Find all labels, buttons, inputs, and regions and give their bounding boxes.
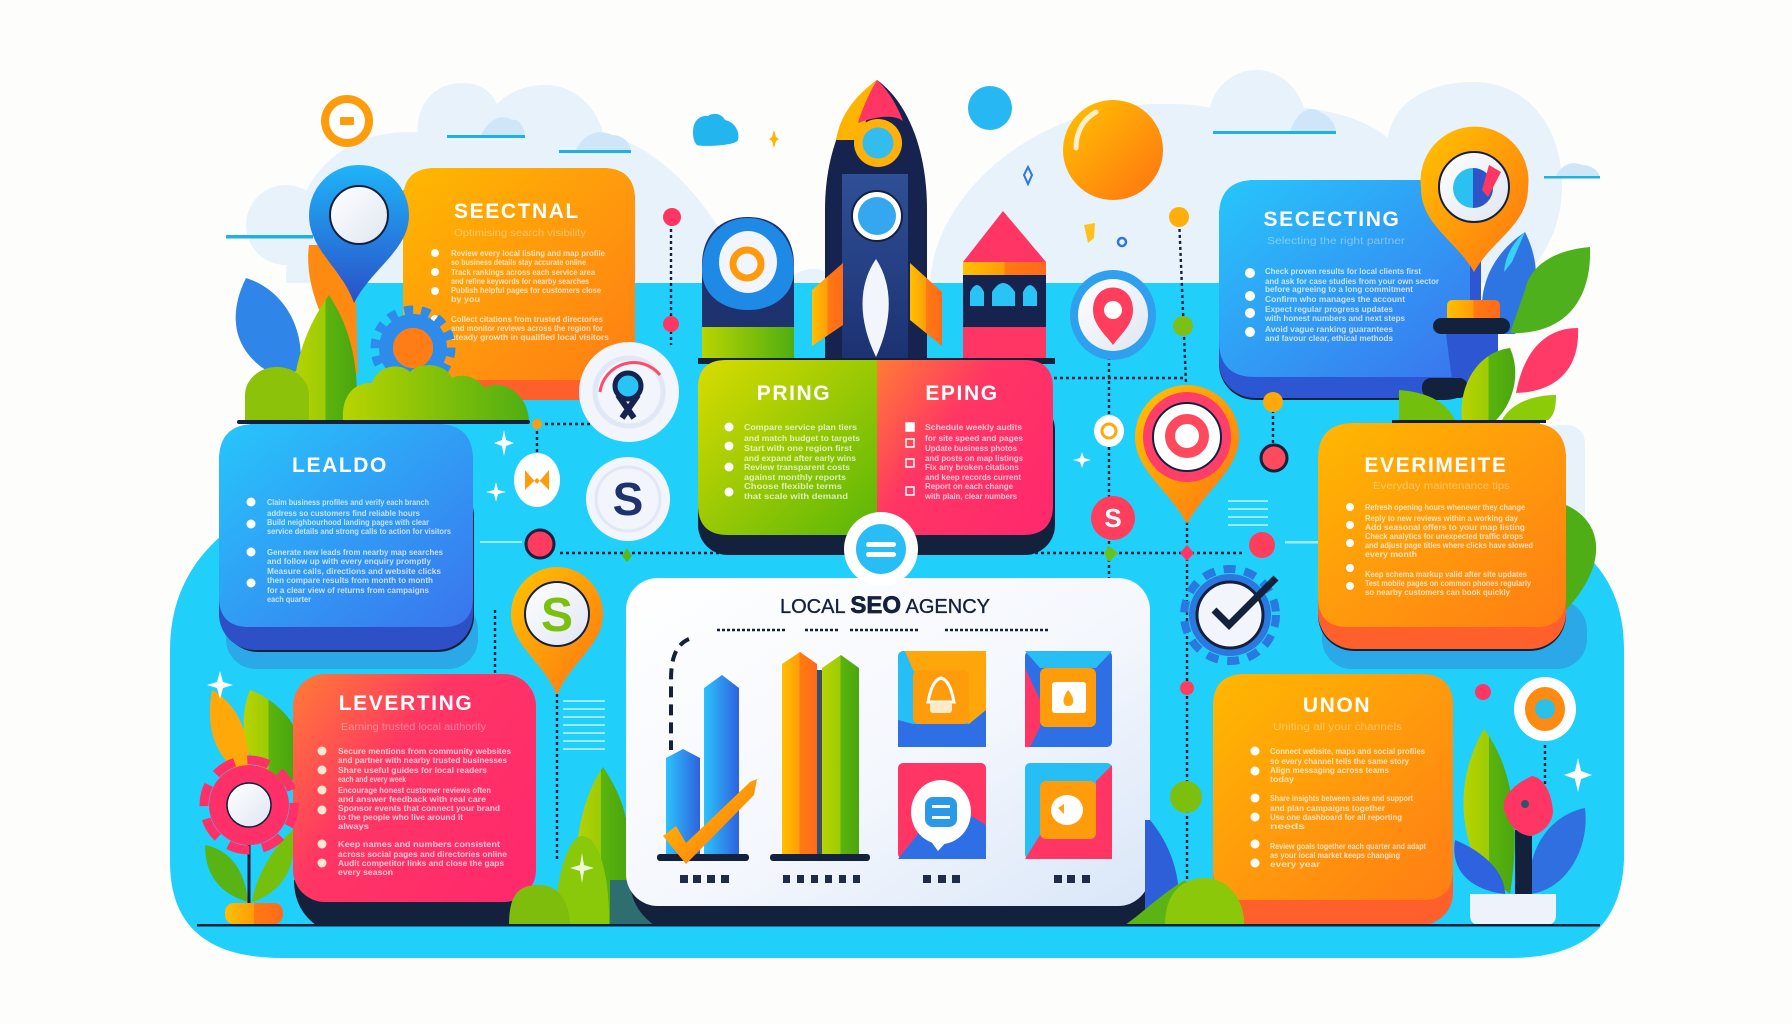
body text: Compare service plan tiers — [744, 423, 858, 432]
checkboxes — [906, 423, 914, 495]
body text: and posts on map listings — [925, 454, 1024, 463]
icon: S location pin: S — [541, 589, 573, 642]
body text: Sponsor events that connect your brand — [338, 804, 500, 813]
icon: cyan cloud — [693, 114, 738, 146]
body text: Update business photos — [925, 444, 1018, 453]
connector dots — [526, 207, 1491, 813]
panel: Pring and Eping — [698, 358, 1055, 555]
bullets — [246, 498, 256, 588]
panel: Lealdo — [219, 424, 474, 652]
body text: Test mobile pages on common phones regularly — [1365, 579, 1531, 588]
panel: Secting card — [1219, 180, 1481, 400]
body text: then compare results from month to month — [267, 576, 433, 585]
body text: today — [1270, 775, 1295, 784]
dot: red right — [1249, 532, 1275, 558]
dot: green ball — [1170, 781, 1202, 813]
panel: Evermeite — [1318, 423, 1596, 651]
bar chart: orange and green bars — [770, 652, 870, 861]
heading: SEECTNAL — [454, 200, 580, 223]
bullets — [724, 422, 734, 496]
pale sky clouds — [246, 70, 1585, 545]
icon: dollar badge — [586, 457, 670, 541]
body text: Review every local listing and map profile — [451, 249, 606, 258]
panel: Leverting — [293, 674, 536, 902]
plants bottom centre-right — [1125, 820, 1244, 925]
dot: yellow top right — [1169, 207, 1189, 227]
body text: and ask for case studies from your own sector — [1265, 277, 1439, 286]
body text: steady growth in qualified local visitors — [451, 333, 610, 342]
icon: orange ring top left — [321, 95, 373, 147]
subheading: Earning trusted local authority — [341, 722, 486, 733]
body text: Collect citations from trusted directories — [451, 315, 604, 324]
bullets — [1250, 746, 1260, 868]
sparkle — [494, 430, 514, 456]
subheading: Uniting all your channels — [1273, 722, 1402, 733]
baseline — [197, 924, 1600, 926]
body text: Check proven results for local clients first — [1265, 267, 1421, 276]
heading: PRING — [757, 382, 831, 405]
dot: red mid — [663, 316, 679, 332]
icon: orange sun — [1063, 100, 1163, 200]
icon: award badge — [579, 342, 679, 442]
green plants and bushes upper left — [237, 295, 530, 424]
icon: check mark — [663, 779, 757, 864]
body text: Choose flexible terms — [744, 482, 843, 491]
icon tile: drop — [1025, 651, 1112, 747]
body text: Expect regular progress updates — [1265, 305, 1394, 314]
body text — [338, 747, 512, 877]
body text: Check analytics for unexpected traffic drops — [1365, 532, 1524, 541]
body text: Audit competitor links and close the gaps — [338, 859, 505, 868]
icon: orange hourglass badge — [514, 453, 560, 507]
body text: against monthly reports — [744, 473, 847, 482]
body text: Add seasonal offers to your map listing — [1365, 523, 1525, 532]
icon: target pin — [1135, 385, 1239, 524]
body text: service details and strong calls to action for visitors — [267, 527, 452, 536]
icon: blue orb — [968, 86, 1012, 130]
body text: Claim business profiles and verify each branch — [267, 498, 429, 507]
sparkle — [486, 482, 506, 502]
subheading: Selecting the right partner — [1267, 236, 1406, 247]
body text: and match budget to targets — [744, 434, 861, 443]
body text: Publish helpful pages for customers close — [451, 286, 602, 295]
body text: Fix any broken citations — [925, 463, 1020, 472]
body text: so nearby customers can book quickly — [1365, 588, 1511, 597]
icon: blue location pin — [309, 165, 409, 303]
body text: across social pages and directories online — [338, 850, 508, 859]
dot: yellow right — [1263, 392, 1283, 412]
dot: red top — [663, 208, 681, 226]
bar chart: blue bars — [657, 675, 749, 861]
icon tile: lens — [1025, 763, 1112, 859]
dot: green diamond right — [1104, 546, 1118, 562]
icon: yellow glint — [1084, 223, 1095, 243]
body text — [924, 423, 1024, 501]
central panel shadow — [630, 880, 1150, 925]
body text — [1264, 267, 1439, 343]
body text: Track rankings across each service area — [451, 268, 596, 277]
heading: EPING — [925, 382, 999, 405]
bullets — [1245, 268, 1255, 337]
body text: Build neighbourhood landing pages with clear — [267, 518, 429, 527]
body text: Keep names and numbers consistent — [338, 840, 500, 849]
right bottom plant — [1454, 729, 1586, 925]
icon: blue glyph — [1118, 238, 1126, 246]
orange pin tail behind card — [308, 190, 418, 375]
body text: by you — [451, 295, 480, 304]
faint data labels — [480, 500, 1321, 750]
body text: with plain, clear numbers — [924, 492, 1018, 501]
castle tower — [963, 211, 1046, 358]
body text: every season — [338, 868, 393, 877]
panel shadows — [226, 600, 1587, 669]
body text: Measure calls, directions and website clicks — [267, 567, 442, 576]
body text — [1365, 503, 1533, 597]
body text: Report on each change — [925, 482, 1014, 491]
title: LOCAL SEO AGENCY — [780, 592, 990, 619]
body text: as your local market keeps changing — [1270, 851, 1400, 860]
body text: Encourage honest customer reviews often — [338, 786, 491, 795]
body text: and partner with nearby trusted businesses — [338, 756, 508, 765]
dot: red left ring — [526, 530, 554, 558]
rocket — [812, 80, 942, 358]
body text: so every channel tells the same story — [1270, 757, 1410, 766]
dashed trend curve — [671, 639, 689, 750]
body text: Avoid vague ranking guarantees — [1265, 325, 1394, 334]
body text: every month — [1365, 550, 1417, 559]
body text: Keep schema markup valid after site updates — [1365, 570, 1528, 579]
body text: Confirm who manages the account — [1265, 295, 1405, 304]
icon: check gear — [1184, 569, 1276, 661]
body text: Review transparent costs — [744, 463, 851, 472]
sparkle — [1564, 758, 1592, 792]
body text: with honest numbers and next steps — [1264, 314, 1406, 323]
bullets — [1346, 503, 1354, 590]
body text: each quarter — [267, 595, 311, 604]
dot: red dark ring — [1261, 445, 1287, 471]
icon: top badge button — [844, 512, 918, 586]
dot: red diamond — [1180, 545, 1194, 561]
heading: EVERIMEITE — [1364, 454, 1508, 477]
icon: red S badge — [1091, 496, 1135, 540]
dot: yellow junction — [532, 419, 542, 429]
body text: every year — [1270, 860, 1320, 869]
body text: Review goals together each quarter and adapt — [1270, 842, 1426, 851]
heading: LEALDO — [292, 454, 388, 477]
body text: and plan campaigns together — [1270, 804, 1385, 813]
icon: top-right sparkle, left — [207, 671, 233, 699]
axis ticks — [680, 875, 1090, 883]
body text — [744, 423, 861, 501]
small orbs and stars top — [693, 86, 1163, 246]
body text: Use one dashboard for all reporting — [1270, 813, 1402, 822]
main cyan backdrop — [170, 283, 1624, 958]
body text: and monitor reviews across the region for — [451, 324, 603, 333]
body text: and adjust page titles where clicks have slowed — [1365, 541, 1533, 550]
body text: before agreeing to a long commitment — [1265, 285, 1413, 294]
icon: red S badge: S — [1104, 503, 1122, 533]
dot: green diamond — [622, 548, 632, 562]
body text: Start with one region first — [744, 444, 852, 453]
icon: small ring — [1094, 415, 1124, 447]
dot: red small — [1180, 681, 1194, 695]
body text: to the people who live around it — [338, 813, 463, 822]
body text: Align messaging across teams — [1270, 766, 1390, 775]
dashed connectors — [495, 217, 1545, 900]
body text: and follow up with every enquiry promptly — [267, 557, 432, 566]
body text: and answer feedback with real care — [338, 795, 487, 804]
icon: ring badge right — [1514, 677, 1576, 741]
icon: S location pin — [511, 567, 603, 695]
body text: Share insights between sales and support — [1270, 794, 1413, 803]
plants centre-left — [509, 767, 665, 925]
panel: Unon — [1213, 674, 1453, 925]
icon: blue sparkle — [1024, 167, 1032, 184]
heading: LEVERTING — [339, 692, 473, 715]
heading: UNON — [1303, 694, 1371, 717]
body text — [1270, 747, 1426, 869]
icon: location badge — [1070, 270, 1156, 360]
upper-left plants — [236, 278, 301, 380]
icon: dollar badge: S — [613, 473, 643, 525]
panel: Local SEO Agency dashboard — [626, 578, 1150, 906]
machine beacon — [702, 217, 794, 358]
heading: SECECTING — [1264, 208, 1400, 231]
subheading: Everyday maintenance tips — [1373, 481, 1510, 492]
dot: green mid right — [1173, 316, 1193, 336]
body text: so business details stay accurate online — [451, 258, 586, 267]
body text: each and every week — [338, 775, 406, 784]
body text: for a clear view of returns from campaigns — [267, 586, 430, 595]
bullets — [431, 249, 439, 323]
body text: Connect website, maps and social profiles — [1270, 747, 1426, 756]
icon tile: chat — [898, 763, 986, 859]
body text: Reply to new reviews within a working day — [1365, 514, 1519, 523]
subheading: Optimising search visibility — [454, 228, 586, 239]
icon tile: shop — [898, 651, 986, 747]
body text: and expand after early wins — [744, 454, 857, 463]
body text: Refresh opening hours whenever they change — [1365, 503, 1526, 512]
panel: Seectnal — [403, 168, 635, 400]
icon: gold sparkle — [769, 130, 779, 148]
dotted rule — [717, 629, 1049, 631]
dot: red small right — [1475, 684, 1491, 700]
sparkles — [486, 430, 1592, 792]
body text: address so customers find reliable hours — [267, 509, 421, 518]
body text: and refine keywords for nearby searches — [451, 277, 589, 286]
body text — [451, 249, 610, 342]
icon: blue gear — [375, 310, 451, 386]
body text: that scale with demand — [744, 492, 848, 501]
body text: Schedule weekly audits — [925, 423, 1023, 432]
body text — [267, 498, 452, 604]
body text: for site speed and pages — [925, 434, 1024, 443]
sky cloud lines — [226, 109, 1600, 238]
plant stalk left of Leverting — [205, 690, 514, 925]
body text: and keep records current — [925, 473, 1021, 482]
body text: Share useful guides for local readers — [338, 766, 488, 775]
body text: always — [338, 822, 370, 831]
icon: red gear flower — [204, 760, 294, 925]
body text: and favour clear, ethical methods — [1265, 334, 1394, 343]
body text: Generate new leads from nearby map searches — [267, 548, 444, 557]
body text: needs — [1270, 822, 1306, 831]
icon: orange pin with dial — [1420, 127, 1528, 272]
sparkle — [1073, 452, 1091, 468]
body text: Secure mentions from community websites — [338, 747, 512, 756]
bullets — [318, 746, 326, 868]
right top plants and stand — [1392, 232, 1590, 423]
